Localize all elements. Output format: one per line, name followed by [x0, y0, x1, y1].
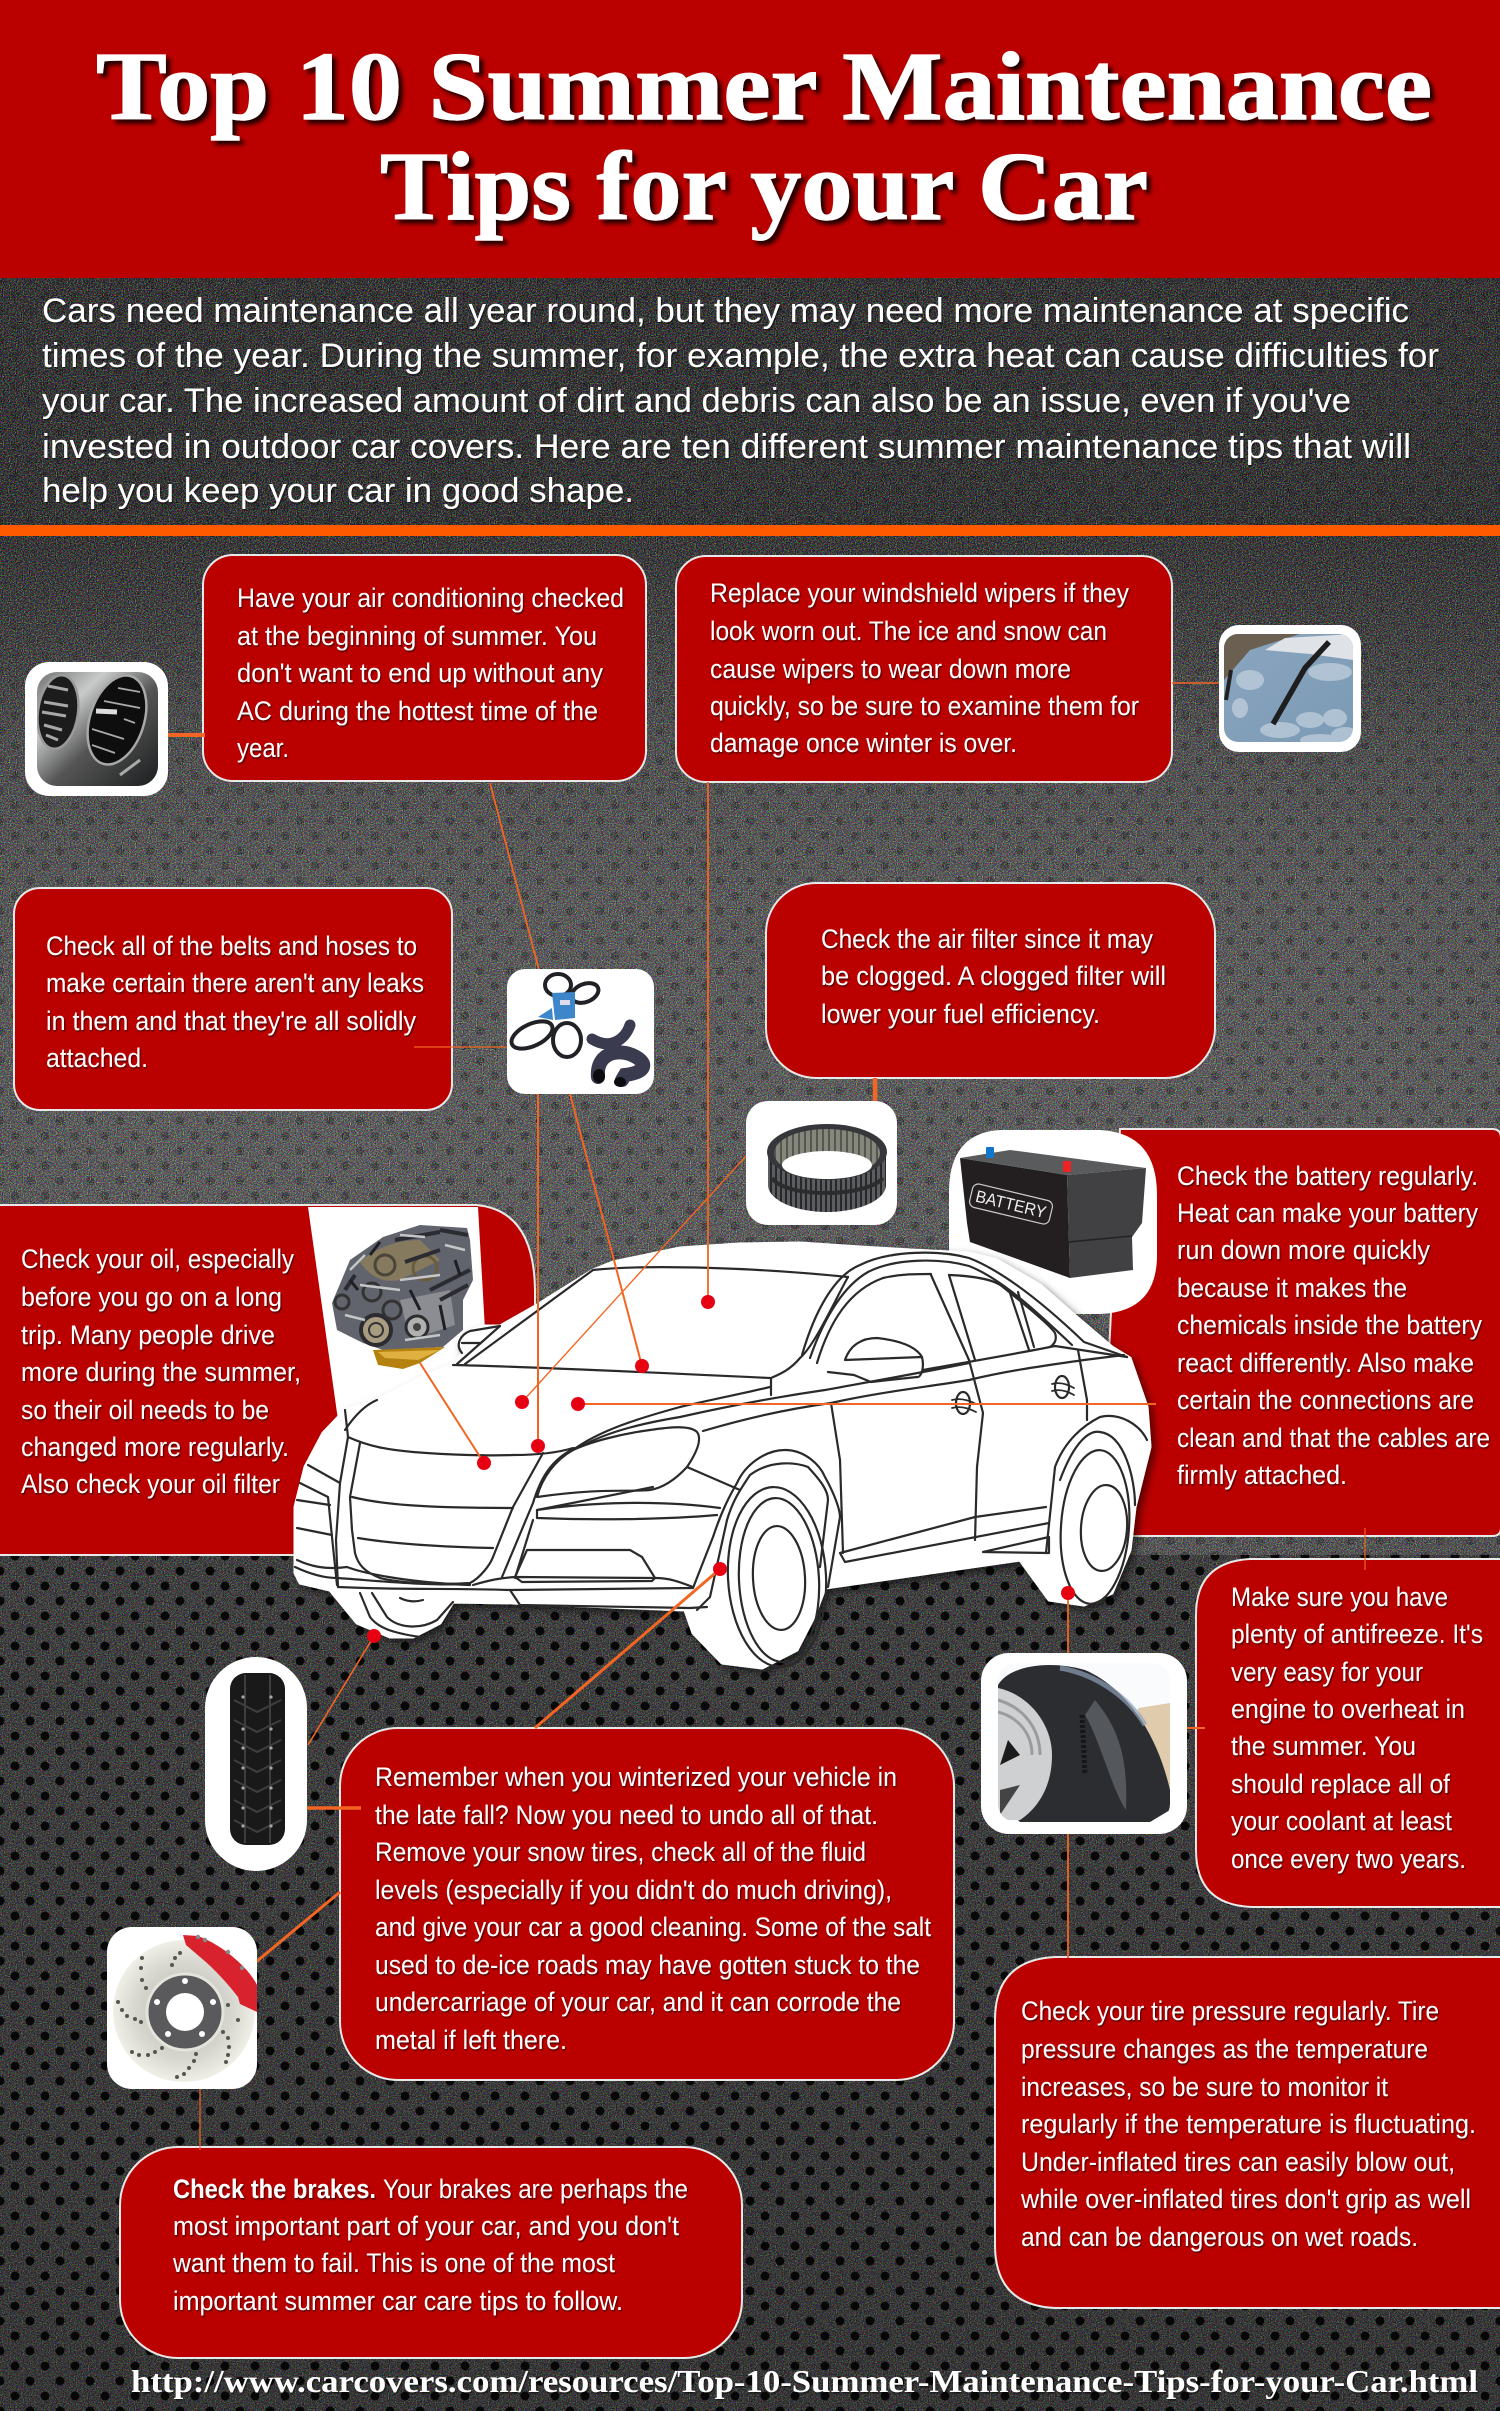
panel: belts and hoses tip [14, 888, 452, 1110]
panel: brakes tip: Check the brakes. [173, 2174, 376, 2204]
panel: windshield wipers tip: look worn out. The ice and snow can [710, 616, 1107, 646]
icon: battery bubble: BATTERY [974, 1187, 1048, 1222]
panel: antifreeze tip: plenty of antifreeze. It's [1231, 1619, 1483, 1649]
panel: antifreeze tip: engine to overheat in [1231, 1694, 1465, 1724]
panel: tire pressure tip: regularly if the temperature is fluctuating. [1021, 2109, 1476, 2139]
icon: tire [981, 1653, 1187, 1834]
panel: winterized vehicle tip: the late fall? Now you need to undo all of that. [375, 1800, 878, 1830]
panel: winterized vehicle tip: undercarriage of your car, and it can corrode the [375, 1987, 901, 2017]
panel: antifreeze tip: the summer. You [1231, 1731, 1416, 1761]
panel: antifreeze tip: very easy for your [1231, 1657, 1423, 1687]
panel: winterized vehicle tip: and give your car a good cleaning. Some of the salt [375, 1912, 931, 1942]
intro text: times of the year. During the summer, for example, the extra heat can cause difficulties for [42, 337, 1439, 375]
panel: oil tip: Also check your oil filter [21, 1469, 280, 1499]
panel: brakes tip: important summer car care tips to follow. [173, 2286, 623, 2316]
panel: belts and hoses tip: attached. [46, 1043, 148, 1073]
panel: battery tip [1100, 1129, 1500, 1536]
orange divider bar [0, 525, 1500, 536]
panel: tire pressure tip: while over-inflated tires don't grip as well [1020, 2184, 1471, 2214]
panel: antifreeze tip: your coolant at least [1231, 1806, 1452, 1836]
panel: air conditioning tip: AC during the hottest time of the [237, 696, 598, 726]
panel: windshield wipers tip: damage once winter is over. [710, 728, 1017, 758]
panel: windshield wipers tip: cause wipers to wear down more [710, 654, 1071, 684]
panel: winterized vehicle tip: levels (especially if you didn't do much driving), [375, 1875, 892, 1905]
panel: belts and hoses tip: in them and that they're all solidly [46, 1006, 416, 1036]
panel: air filter tip: Check the air filter since it may [821, 924, 1153, 954]
panel: oil tip: trip. Many people drive [21, 1320, 275, 1350]
panel: oil tip: more during the summer, [21, 1357, 301, 1387]
panel: tire pressure tip: increases, so be sure to monitor it [1021, 2072, 1388, 2102]
panel: winterized vehicle tip: used to de-ice roads may have gotten stuck to the [375, 1950, 920, 1980]
panel: air conditioning tip: year. [237, 733, 289, 763]
icon: belts and hoses [507, 969, 654, 1094]
intro text: invested in outdoor car covers. Here are ten different summer maintenance tips that will [42, 428, 1411, 466]
panel: battery tip: firmly attached. [1177, 1460, 1347, 1490]
title [96, 33, 1432, 241]
panel: air conditioning tip: don't want to end up without any [237, 658, 603, 688]
icon: snow tire [205, 1657, 307, 1871]
panel: tire pressure tip: Check your tire pressure regularly. Tire [1021, 1996, 1439, 2026]
panel: battery tip: certain the connections are [1177, 1385, 1474, 1415]
panel: winterized vehicle tip: metal if left there. [375, 2025, 567, 2055]
panel: antifreeze tip: once every two years. [1231, 1844, 1466, 1874]
panel: windshield wipers tip [676, 556, 1172, 782]
panel: battery tip: Check the battery regularly. [1177, 1161, 1478, 1191]
panel: brakes tip [120, 2147, 742, 2358]
panel: brakes tip: most important part of your car, and you don't [173, 2211, 679, 2241]
panel: belts and hoses tip: Check all of the belts and hoses to [46, 931, 417, 961]
icon: brake disc [107, 1927, 257, 2089]
panel: oil tip: changed more regularly. [21, 1432, 289, 1462]
panel: air conditioning tip [203, 555, 646, 781]
icon: windshield wiper [1219, 625, 1361, 752]
panel: tire pressure tip: pressure changes as the temperature [1021, 2034, 1428, 2064]
panel: winterized vehicle tip: Remove your snow tires, check all of the fluid [375, 1837, 866, 1867]
title: Top 10 Summer Maintenance [96, 33, 1432, 141]
panel: windshield wipers tip: quickly, so be sure to examine them for [710, 691, 1139, 721]
icon: engine [308, 1207, 485, 1420]
panel: tire pressure tip: and can be dangerous on wet roads. [1021, 2222, 1418, 2252]
panel: winterized vehicle tip [340, 1728, 954, 2080]
panel: antifreeze tip [1196, 1559, 1500, 1907]
panel: oil tip: before you go on a long [21, 1282, 282, 1312]
panel: windshield wipers tip: Replace your windshield wipers if they [710, 578, 1129, 608]
panel: battery tip: run down more quickly [1177, 1235, 1430, 1265]
panel: tire pressure tip: Under-inflated tires can easily blow out, [1021, 2147, 1455, 2177]
panel: antifreeze tip: Make sure you have [1231, 1582, 1448, 1612]
panel: air filter tip [766, 883, 1215, 1078]
source url: http://www.carcovers.com/resources/Top-10-Summer-Maintenance-Tips-for-your-Car.html [131, 2363, 1478, 2399]
panel: air conditioning tip: Have your air conditioning checked [237, 583, 624, 613]
intro text: help you keep your car in good shape. [42, 472, 634, 510]
car silhouette [295, 1243, 1150, 1668]
panel: antifreeze tip: should replace all of [1231, 1769, 1450, 1799]
panel: brakes tip: want them to fail. This is one of the most [172, 2248, 615, 2278]
intro text: Cars need maintenance all year round, but they may need more maintenance at specific [42, 292, 1409, 330]
panel: battery tip: react differently. Also make [1177, 1348, 1474, 1378]
panel: belts and hoses tip: make certain there aren't any leaks [46, 968, 424, 998]
panel: air filter tip: lower your fuel efficiency. [821, 999, 1100, 1029]
car line work [295, 1253, 1147, 1669]
car marker dots [367, 1295, 1075, 1643]
panel: winterized vehicle tip: Remember when you winterized your vehicle in [375, 1762, 897, 1792]
panel: tire pressure tip [995, 1957, 1500, 2308]
icon: air filter [746, 1101, 897, 1225]
panel: air conditioning tip: at the beginning of summer. You [237, 621, 597, 651]
intro text: your car. The increased amount of dirt and debris can also be an issue, even if you've [42, 382, 1351, 420]
panel: oil tip: so their oil needs to be [21, 1395, 269, 1425]
icon: battery bubble [949, 1130, 1157, 1314]
panel: oil tip: Check your oil, especially [21, 1244, 294, 1274]
connector lines [167, 683, 1365, 2150]
icon: air vents [25, 662, 168, 796]
title: Tips for your Car [380, 133, 1148, 241]
header band with title [0, 0, 1500, 278]
panel: battery tip: Heat can make your battery [1177, 1198, 1478, 1228]
car illustration [295, 1243, 1150, 1669]
panel: battery tip: because it makes the [1177, 1273, 1407, 1303]
panel: brakes tip: Your brakes are perhaps the [383, 2174, 688, 2204]
intro text [42, 292, 1439, 510]
panel: air filter tip: be clogged. A clogged filter will [821, 961, 1166, 991]
panel: oil tip [0, 1205, 535, 1555]
